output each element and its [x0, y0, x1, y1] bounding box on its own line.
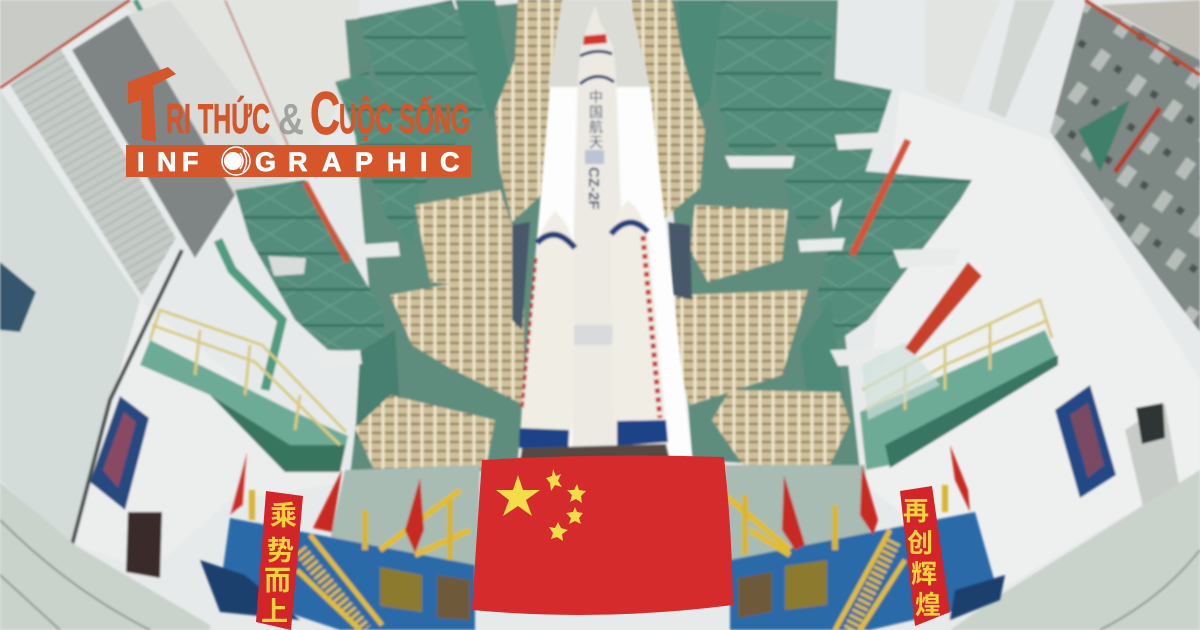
logo: GRAPHIC — [255, 147, 460, 177]
white pods left — [352, 242, 400, 258]
left backdrop behind towers — [345, 0, 552, 475]
red wall banner — [905, 262, 982, 355]
left lower platform — [140, 340, 348, 472]
flag stars — [496, 469, 586, 541]
logo wordmark: & — [278, 95, 304, 144]
right backdrop behind towers — [650, 0, 860, 470]
black wall pipe — [72, 250, 182, 545]
right lower platform — [860, 330, 1058, 470]
logo: INF — [137, 147, 198, 177]
door panel — [126, 512, 162, 578]
corrugated panel — [10, 48, 176, 296]
rocket core — [572, 5, 622, 460]
logo wordmark: C — [310, 80, 340, 147]
logo wordmark: UỘC SỐNG — [339, 94, 470, 142]
left banner: 势 — [267, 536, 294, 566]
base windows — [380, 567, 422, 612]
white pods right — [835, 132, 890, 150]
top left green platform — [358, 0, 490, 190]
upper stairs — [380, 490, 790, 555]
rocket markings: CZ-2F — [585, 167, 602, 210]
logo wordmark — [166, 80, 470, 147]
rocket and light shaft — [518, 0, 692, 460]
infographic ribbon — [126, 145, 471, 177]
right scaffolds — [630, 0, 705, 130]
right banner: 煌 — [915, 590, 941, 620]
left banner — [256, 491, 303, 630]
Chinese national flag — [472, 456, 733, 615]
rocket markings: 中 — [589, 89, 603, 105]
left door — [0, 262, 36, 332]
scaffold left stacks — [495, 0, 565, 110]
ceiling top-left — [0, 0, 360, 190]
right banner: 再 — [903, 496, 929, 526]
stairs left — [297, 535, 382, 630]
left banner: 乘 — [270, 501, 297, 531]
left banner: 上 — [261, 597, 288, 627]
upper left green platform — [235, 180, 385, 352]
poster right — [1055, 385, 1116, 498]
poster left — [90, 396, 149, 510]
logo O icon — [222, 147, 250, 175]
dark column — [72, 15, 235, 258]
right banner: 创 — [907, 528, 933, 558]
rocket markings — [585, 89, 604, 210]
right booster — [611, 200, 668, 446]
left booster — [520, 211, 575, 455]
floor — [0, 482, 210, 630]
stairs right — [835, 530, 905, 630]
logo wordmark: RI THỨC — [166, 94, 270, 142]
right platform railing — [862, 300, 1052, 410]
wall flag left — [230, 452, 247, 515]
right window wall — [1050, 0, 1200, 332]
right upper columns — [925, 0, 1000, 105]
rocket markings: 国 — [589, 104, 603, 120]
lower gantry backdrop — [330, 465, 480, 570]
left platform railing — [150, 310, 346, 445]
light shaft — [518, 87, 692, 458]
left wall — [0, 90, 140, 545]
logo — [126, 67, 471, 177]
right banner — [900, 486, 950, 626]
far right wall dark unit — [1125, 404, 1180, 515]
right banner: 辉 — [911, 559, 937, 589]
left banner: 而 — [264, 566, 291, 596]
right upper green — [715, 0, 835, 172]
launch platform blue base — [200, 445, 1005, 630]
logo T mark — [128, 67, 176, 142]
right wall — [860, 90, 1200, 590]
red flags — [313, 470, 342, 532]
rocket markings: 天 — [589, 134, 603, 150]
green pipes left — [218, 240, 282, 390]
rocket markings: 航 — [589, 119, 603, 135]
